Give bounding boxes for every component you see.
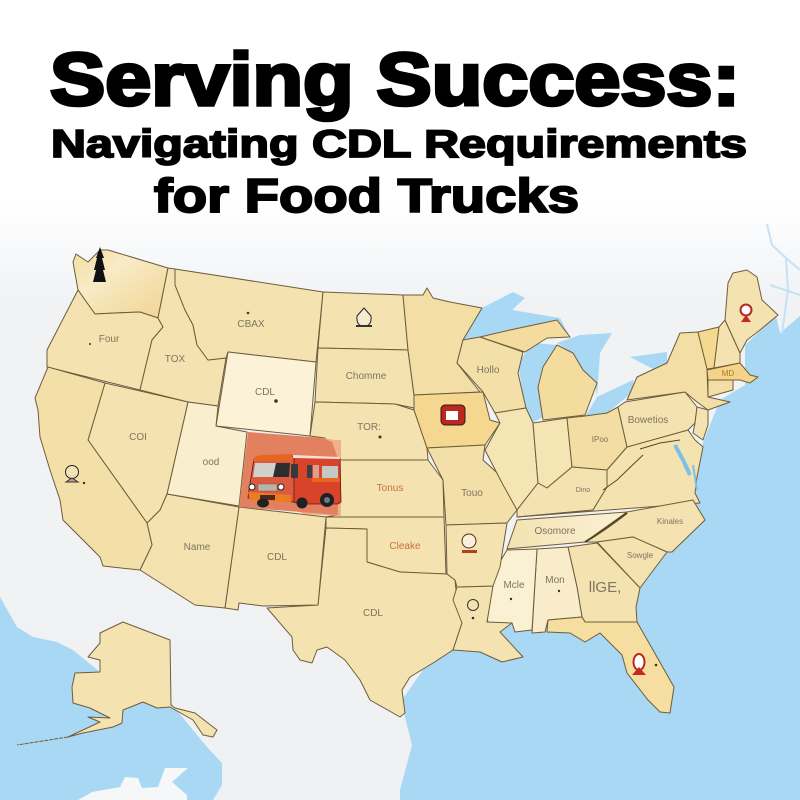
state: Utah: ood [203,457,219,468]
state: Massachusetts: MD [722,369,734,378]
state: Pennsylvania [618,392,697,447]
state: Wisconsin: Hollo [477,365,500,376]
state: Michigan lower peninsula [538,345,597,420]
state: Texas: CDL [363,608,383,619]
great lakes [463,292,667,423]
state: Oklahoma [326,517,446,574]
icon: food truck [248,454,341,508]
state: Mississippi [487,549,537,632]
state: Alabama: Mon [545,575,565,586]
state: South Dakota [315,348,414,408]
state: Arkansas [446,523,507,587]
icon: pin Florida [632,654,646,675]
state: Arizona: Name [184,542,211,553]
icon: pin Arkansas [462,534,477,553]
title [50,38,747,222]
state: Wisconsin [457,337,526,413]
state: Idaho [140,268,226,406]
state: Idaho: TOX [165,354,186,365]
state: Connecticut and Rhode Island [708,380,733,397]
state: Montana [175,269,323,362]
state: Missouri [427,445,517,525]
state: South Carolina [597,537,667,588]
state: Tennessee [507,512,627,549]
state: Iowa [414,392,500,448]
state: Utah [167,402,247,506]
icon: pin North Dakota [356,308,372,327]
lake huron [557,333,612,397]
title line 1: Serving Success: [50,38,740,121]
state: Georgia: llGE, [589,579,621,596]
icon: red van on Iowa [441,405,465,425]
state: Florida [547,617,674,713]
state: Alabama [532,547,582,633]
map of states [17,250,778,745]
lake erie [585,380,635,417]
map markers [83,312,657,666]
state: Alaska [68,622,217,737]
state: Tennessee: Osomore [534,526,576,537]
Virginia border and Chesapeake Bay [603,440,697,490]
headlights and grille [249,484,255,490]
state: Illinois [485,408,538,510]
state: Nebraska [310,402,428,460]
state: Pennsylvania: Bowetios [628,415,668,426]
state: Vermont [698,327,719,369]
state: Wyoming: CDL [255,387,275,398]
side windows [307,465,312,478]
state: Georgia [568,543,640,622]
state: New Jersey and Delaware [693,407,708,440]
state: New York [627,332,730,410]
state: Maine [725,270,778,353]
state: Kansas: Tonus [377,483,403,494]
state: North Carolina: Kinales [657,517,683,526]
state: Louisiana [453,586,523,662]
state: Texas [267,528,462,717]
state: North Dakota [318,292,408,350]
state: Ohio: IPoo [592,435,609,444]
wheels [257,498,269,508]
state: Oklahoma: Cleake [389,541,421,552]
state: Washington [73,250,168,318]
ocean: atlantic and gulf [400,316,800,800]
Aleutian islands [17,737,68,745]
bumper [248,492,291,502]
Appalachian ridge mark [585,513,627,542]
state: North Carolina [585,500,705,552]
icon: pin Maine [740,304,752,322]
state: South Dakota: Chomme [346,371,387,382]
Colorado highlight behind truck [239,432,341,516]
title line 3: for Food Trucks [154,169,579,222]
state: Arizona [140,494,239,608]
windshield [253,463,290,477]
lake superior [463,292,570,352]
state: Michigan upper peninsula [480,320,570,352]
title line 2: Navigating CDL Requirements [51,123,747,166]
state: Oregon [47,290,163,390]
state: Ohio [567,407,627,470]
state: Nebraska: TOR: [357,422,381,433]
state: Oregon: Four [99,334,120,345]
ocean: pacific [0,597,222,800]
icon: pin Louisiana [468,600,478,610]
state: California [35,367,152,570]
state: New Hampshire [714,320,740,368]
state: New Mexico [225,507,326,610]
state: Kansas [325,460,444,517]
orange stripe [312,478,340,482]
icon: pin California [66,466,78,482]
state: Kentucky [517,467,607,517]
lake michigan [518,343,557,423]
state: New Mexico: CDL [267,552,287,563]
state: Mississippi: Mcle [503,580,525,591]
state: South Carolina: Sowgle [627,551,654,560]
lake ontario [630,352,667,370]
truck cab [248,456,294,502]
state: Montana: CBAX [237,319,265,330]
white roof trim [293,455,340,459]
truck box body [293,456,341,504]
state: Kentucky: Dino [576,487,590,494]
state: Nevada [88,383,188,523]
state: Missouri: Touo [461,488,483,499]
st lawrence river [767,224,800,333]
state: Nevada: COI [129,432,147,443]
door window [291,464,298,478]
state: Indiana [533,418,572,488]
cab roof visor [253,454,292,461]
state: Minnesota [403,288,482,395]
icon: pine tree in Washington [93,247,106,282]
state: Wyoming [216,352,316,436]
ice patches [78,768,188,800]
state: Virginia, West Virginia and Maryland [517,430,703,517]
state: Massachusetts [707,363,758,383]
